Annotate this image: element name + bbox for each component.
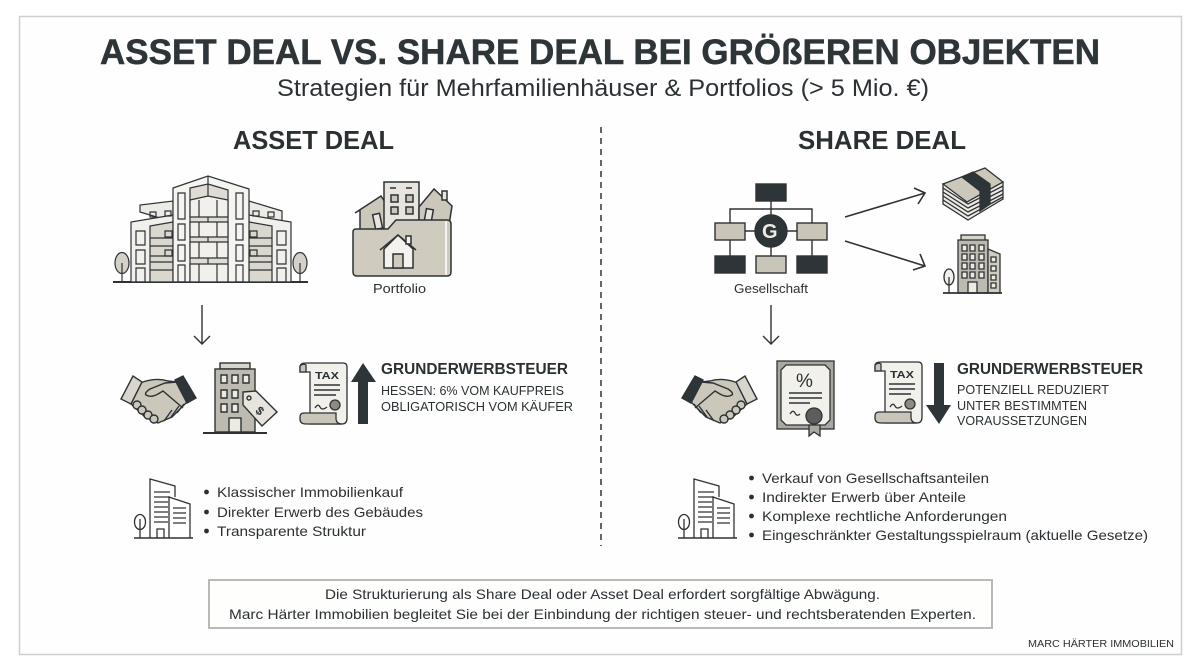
callout: Die Strukturierung als Share Deal oder Asset Deal erfordert sorgfältige Abwägung. (325, 586, 880, 602)
icon: handshake left (121, 376, 196, 423)
callout: Marc Härter Immobilien begleitet Sie bei der Einbindung der richtigen steuer- und rechtsberatenden Experten. (229, 606, 976, 622)
heading: asset deal: ASSET DEAL (233, 125, 394, 155)
list: asset deal (204, 484, 423, 539)
brand footer: MARC HÄRTER IMMOBILIEN (1028, 638, 1174, 650)
text: grunderwerbsteuer share (957, 361, 1143, 428)
text: grunderwerbsteuer share: VORAUSSETZUNGEN (957, 413, 1087, 428)
icon: handshake right (682, 376, 757, 423)
tag symbol: $ (253, 403, 267, 419)
icon: city right (678, 479, 737, 538)
company G letter: G (762, 221, 778, 243)
text: grunderwerbsteuer asset: OBLIGATORISCH VOM KÄUFER (381, 399, 573, 414)
icon: portfolio folder (353, 182, 452, 276)
icon: tax scroll left (300, 363, 347, 424)
icon: tax scroll right (875, 362, 922, 423)
icon: money stack (943, 168, 1003, 220)
callout (209, 580, 992, 628)
list: asset deal: Transparente Struktur (217, 523, 366, 539)
subtitle: Strategien für Mehrfamilienhäuser & Portfolios (> 5 Mio. €) (277, 75, 929, 102)
text: grunderwerbsteuer share: POTENZIELL REDUZIERT (957, 382, 1109, 397)
text: grunderwerbsteuer asset (381, 361, 573, 414)
list: asset deal: Klassischer Immobilienkauf (217, 484, 403, 500)
text: grunderwerbsteuer share: UNTER BESTIMMTEN (957, 398, 1087, 413)
text: grunderwerbsteuer asset: GRUNDERWERBSTEUER (381, 361, 568, 378)
list: share deal: Indirekter Erwerb über Anteile (762, 489, 966, 505)
heading: share deal: SHARE DEAL (798, 125, 966, 155)
icon: office building (943, 235, 1002, 293)
divider (600, 127, 602, 546)
percent sign: % (796, 371, 813, 392)
list: share deal: Eingeschränkter Gestaltungsspielraum (aktuelle Gesetze) (762, 527, 1148, 543)
icon: city left (134, 479, 193, 538)
title: ASSET DEAL VS. SHARE DEAL BEI GRÖßEREN OBJEKTEN (100, 33, 1100, 72)
label: gesellschaft: Gesellschaft (734, 282, 809, 296)
arrow: share deal down (763, 305, 779, 344)
arrow: tax up (351, 363, 376, 424)
label: portfolio: Portfolio (373, 282, 426, 296)
text: grunderwerbsteuer share: GRUNDERWERBSTEUER (957, 361, 1143, 378)
list: share deal: Verkauf von Gesellschaftsanteilen (762, 470, 989, 486)
icon: building with price tag (203, 363, 277, 433)
tax word left: TAX (315, 370, 339, 382)
icon: certificate (777, 361, 834, 436)
text: grunderwerbsteuer asset: HESSEN: 6% VOM KAUFPREIS (381, 383, 564, 398)
icon: apartment building (113, 176, 308, 282)
tax word right: TAX (890, 369, 914, 381)
list: share deal (749, 470, 1148, 543)
icon: company structure (715, 184, 827, 273)
arrow: asset deal down (194, 305, 210, 344)
list: asset deal: Direkter Erwerb des Gebäudes (217, 504, 423, 520)
arrow: to money (845, 188, 925, 217)
arrow: tax down (926, 363, 951, 424)
arrow: to building (845, 241, 925, 270)
list: share deal: Komplexe rechtliche Anforderungen (762, 508, 1007, 524)
